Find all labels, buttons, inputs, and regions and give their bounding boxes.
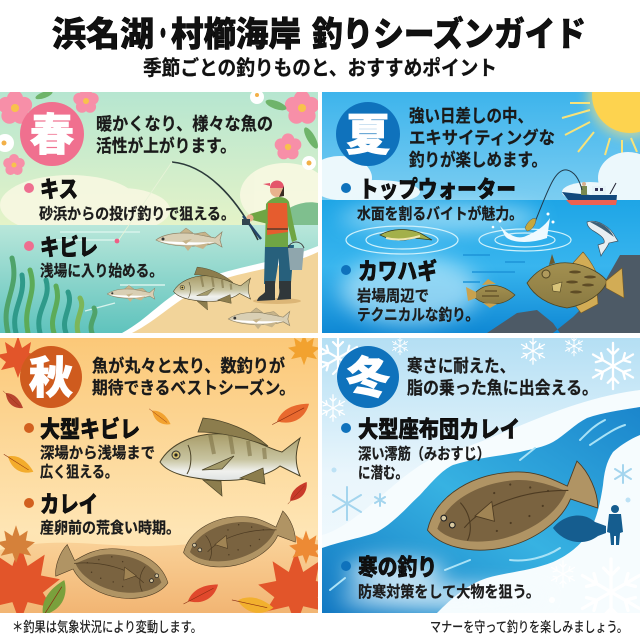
bullet: 大型座布団カレイ: に潜む。 bbox=[358, 464, 408, 482]
title: ・ bbox=[155, 16, 171, 54]
bullet: トップウォーター bbox=[341, 176, 523, 223]
fish: flounder right bbox=[178, 505, 299, 575]
panel: autumn bbox=[0, 333, 334, 626]
lure bbox=[380, 229, 432, 240]
hill bbox=[290, 202, 318, 225]
intro text: 活性が上がります。 bbox=[96, 136, 236, 156]
title bbox=[52, 15, 586, 54]
fish: kibire bbox=[174, 267, 250, 310]
bullet: 寒の釣り: 防寒対策をして大物を狙う。 bbox=[358, 582, 540, 601]
text glow bbox=[340, 560, 550, 608]
bullet: 大型キビレ: 大型キビレ bbox=[40, 416, 140, 442]
seasonal badge: spring bbox=[20, 99, 84, 166]
bullet: 大型キビレ: 広く狙える。 bbox=[40, 463, 118, 481]
ripples left bbox=[346, 226, 458, 254]
rocks bbox=[487, 255, 640, 333]
snowflakes bbox=[316, 336, 640, 625]
fish: small kisu bbox=[107, 285, 155, 302]
river highlights bbox=[330, 420, 625, 590]
intro text: 釣りが楽しめます。 bbox=[409, 150, 547, 170]
clouds bbox=[322, 152, 640, 200]
leaves bbox=[35, 89, 320, 150]
title: 浜名湖 bbox=[52, 16, 154, 54]
intro text bbox=[92, 356, 295, 398]
bullet: カレイ: 産卵前の荒食い時期。 bbox=[40, 518, 180, 537]
river bbox=[322, 407, 640, 613]
bullet: 大型座布団カレイ: 大型座布団カレイ bbox=[358, 416, 520, 442]
bullet: カワハギ: テクニカルな釣り。 bbox=[357, 305, 479, 324]
bullet: キス: キス bbox=[40, 176, 78, 202]
intro text: 寒さに耐えた、 bbox=[407, 356, 515, 376]
intro text: エキサイティングな bbox=[409, 128, 555, 148]
bullet: トップウォーター: 水面を割るバイトが魅力。 bbox=[357, 204, 523, 223]
bullet: カレイ bbox=[24, 491, 180, 537]
panel: winter bbox=[316, 336, 640, 625]
white bank bbox=[322, 390, 640, 613]
bullet: カワハギ bbox=[341, 258, 479, 324]
snowflakes on pale ground bbox=[333, 465, 631, 520]
wave marks bbox=[463, 255, 525, 282]
water bbox=[0, 225, 318, 333]
seasonal badge: autumn: 秋 bbox=[29, 342, 73, 406]
intro text: 魚が丸々と太り、数釣りが bbox=[92, 356, 285, 376]
fish: large flounder bbox=[418, 451, 603, 564]
fish: kisu bbox=[156, 228, 222, 251]
sea bbox=[322, 200, 640, 333]
seasonal badge: summer bbox=[336, 99, 400, 166]
jumping fish bbox=[587, 221, 618, 256]
angler bbox=[242, 180, 304, 304]
fish: flounder left bbox=[53, 539, 172, 606]
bullet: 寒の釣り bbox=[341, 554, 540, 601]
splash bbox=[492, 212, 554, 242]
water highlights bbox=[50, 232, 165, 311]
title: 村櫛海岸 bbox=[171, 16, 301, 54]
fish: large kibire bbox=[160, 418, 300, 496]
boat bbox=[562, 182, 617, 205]
seaweed bbox=[6, 258, 95, 333]
text glow bbox=[340, 204, 540, 324]
bullet: 大型キビレ: 深場から浅場まで bbox=[40, 443, 155, 462]
clouds bbox=[0, 163, 318, 225]
bullet: キス: 砂浜からの投げ釣りで狙える。 bbox=[39, 204, 235, 223]
sun bbox=[562, 92, 640, 156]
panel: summer bbox=[322, 92, 640, 333]
sand bbox=[0, 536, 318, 613]
seasonal badge: spring: 春 bbox=[30, 99, 74, 163]
bullet: 大型座布団カレイ: 深い澪筋（みおすじ） bbox=[358, 444, 490, 463]
bullet: キス bbox=[24, 178, 226, 221]
ripples right bbox=[479, 229, 571, 251]
seasonal badge: autumn bbox=[20, 342, 82, 408]
flounder silhouette bbox=[553, 515, 606, 542]
bullet: キビレ: 浅場に入り始める。 bbox=[40, 261, 163, 280]
seasonal badge: winter bbox=[337, 342, 399, 408]
bullet: キビレ: キビレ bbox=[40, 234, 98, 260]
intro text: 脂の乗った魚に出会える。 bbox=[407, 378, 598, 398]
bullet: 寒の釣り: 寒の釣り bbox=[358, 554, 437, 580]
bullet: カワハギ: カワハギ bbox=[358, 258, 437, 284]
seasonal badge: winter: 冬 bbox=[346, 342, 390, 406]
title: 釣りシーズンガイド bbox=[312, 15, 586, 54]
panel: spring bbox=[0, 88, 330, 333]
sand bbox=[122, 246, 318, 333]
footnote: ＊釣果は気象状況により変動します。 bbox=[12, 619, 202, 635]
small filefish bbox=[466, 279, 515, 308]
large filefish bbox=[527, 252, 624, 313]
intro text bbox=[96, 114, 273, 156]
bullet: 大型座布団カレイ bbox=[341, 416, 520, 482]
person silhouette bbox=[607, 505, 623, 545]
sakura flowers bbox=[0, 88, 319, 175]
fish: kisu on sand bbox=[228, 308, 290, 329]
fishing line bbox=[535, 170, 582, 222]
intro text bbox=[407, 356, 598, 398]
intro text: 強い日差しの中、 bbox=[409, 106, 533, 126]
bullet: カレイ: カレイ bbox=[40, 491, 98, 517]
seasonal badge: summer: 夏 bbox=[346, 99, 390, 163]
bullet: キビレ bbox=[24, 234, 154, 278]
intro text: 暖かくなり、様々な魚の bbox=[96, 114, 273, 134]
bullet: 大型キビレ bbox=[24, 416, 155, 481]
fishing rod and line bbox=[118, 162, 258, 241]
fallen leaves bbox=[3, 386, 312, 624]
bullet: トップウォーター: トップウォーター bbox=[359, 176, 516, 202]
intro text: 期待できるベストシーズン。 bbox=[92, 378, 295, 398]
subtitle: 季節ごとの釣りものと、おすすめポイント bbox=[143, 56, 497, 80]
float bbox=[115, 239, 119, 243]
bullet: カワハギ: 岩場周辺で bbox=[357, 287, 429, 305]
maple leaves bbox=[0, 333, 334, 626]
intro text bbox=[409, 106, 555, 170]
